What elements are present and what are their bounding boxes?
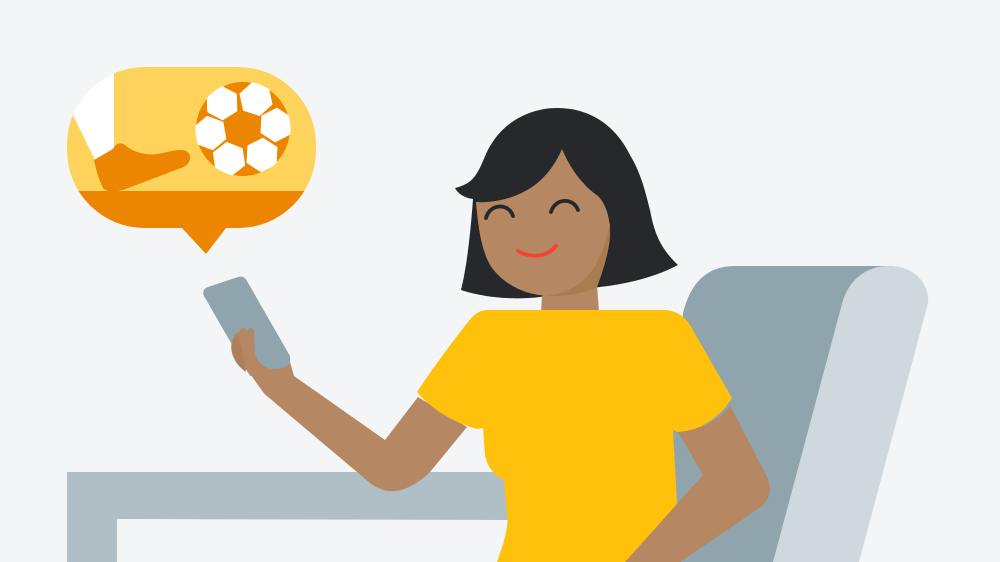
ball panels xyxy=(193,80,291,177)
leg xyxy=(73,74,114,160)
right eye xyxy=(551,201,578,212)
chair side xyxy=(773,266,928,562)
armchair xyxy=(673,266,928,562)
face shade xyxy=(545,222,610,296)
woman's hair xyxy=(455,108,678,298)
ball base xyxy=(196,82,290,176)
left arm and hand xyxy=(231,328,467,491)
smile xyxy=(518,246,556,256)
right arm xyxy=(625,405,770,562)
face base xyxy=(476,149,610,296)
ground band xyxy=(67,191,316,228)
left eye xyxy=(486,206,513,218)
fingers xyxy=(232,336,246,372)
arm xyxy=(231,328,467,491)
foot xyxy=(94,143,190,191)
bubble body xyxy=(67,67,316,228)
bubble tail xyxy=(182,228,226,254)
speech bubble xyxy=(60,60,316,254)
phone xyxy=(203,277,290,376)
yellow t-shirt xyxy=(417,310,732,562)
table xyxy=(67,472,510,562)
illustration xyxy=(67,67,928,562)
football xyxy=(193,80,291,177)
face xyxy=(476,149,610,296)
chair back xyxy=(673,266,893,562)
neck xyxy=(541,285,599,312)
